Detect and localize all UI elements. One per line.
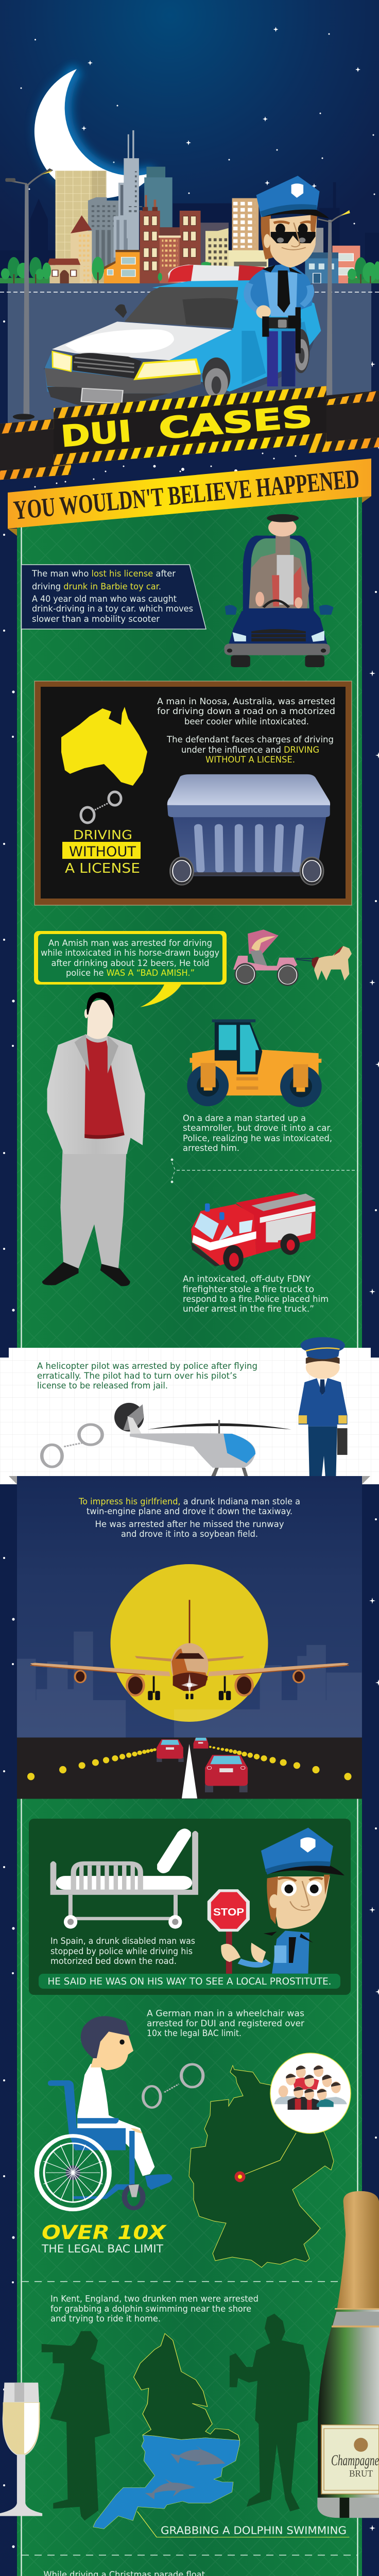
icon: running police officer <box>205 2576 359 2577</box>
case: Kent dolphin text: and trying to ride it home. <box>50 2314 161 2324</box>
icon: champagne bottle <box>317 2191 379 2518</box>
OVER 10X legal BAC limit callout: THE LEGAL BAC LIMIT <box>41 2243 163 2255</box>
dashed separator <box>22 2554 357 2555</box>
case: Amish man speech bubble <box>34 931 227 1007</box>
yellow subtitle banner <box>8 459 371 536</box>
case: fire truck: respond to a fire.Police placed him <box>183 1294 329 1304</box>
map of England with dolphins <box>93 2333 349 2537</box>
icon: hospital bed <box>50 1828 198 1929</box>
map pin <box>235 2171 245 2182</box>
text block: beer cooler while intoxicated. <box>184 717 309 726</box>
case: Kent dolphin text <box>50 2294 259 2324</box>
case: fire truck: firefighter stole a fire truck to <box>183 1284 314 1294</box>
map of Germany with pin and circle <box>189 2053 351 2267</box>
panel: helicopter pilot: A helicopter pilot was arrested by police after flying <box>37 1361 257 1371</box>
case: German man in wheelchair text <box>147 2008 304 2038</box>
case: toy car text box: The man who lost his license after <box>31 569 176 579</box>
green panel background <box>17 494 362 2576</box>
icon: handcuffs <box>81 792 121 823</box>
quote banner: HE SAID HE WAS ON HIS WAY TO SEE A LOCAL PROSTITUTE. <box>47 1976 332 1987</box>
panel: chalkboard beer cooler story <box>35 681 352 905</box>
case: toy car text box: slower than a mobility scooter <box>32 614 160 624</box>
icon: airplane front view <box>30 1600 349 1700</box>
stop sign label: STOP <box>213 1907 244 1918</box>
case: Kent dolphin text: In Kent, England, two drunken men were arrested <box>50 2294 259 2304</box>
night sky stars <box>21 27 375 487</box>
panel: helicopter pilot: license to be released from jail. <box>37 1381 168 1391</box>
panel: stolen plane at night: He was arrested after he missed the runway <box>95 1519 284 1529</box>
icon: dolphin upper <box>170 2445 225 2465</box>
city skyline <box>0 130 379 283</box>
icon: man in grey suit <box>42 992 145 1286</box>
dashed separator <box>22 2281 344 2282</box>
case: steamroller: On a dare a man started up a <box>183 1113 306 1123</box>
case: German man in wheelchair text: A German man in a wheelchair was <box>147 2008 304 2019</box>
case: steamroller: arrested him. <box>183 1143 239 1153</box>
case: Amish man speech bubble: while intoxicated in his horse-drawn buggy <box>41 948 219 958</box>
police car <box>43 265 321 406</box>
icon: map of Australia <box>61 707 147 786</box>
highway with yellow road lights and red cars <box>17 1737 362 1799</box>
panel: stolen plane at night: and drove it into a soybean field. <box>121 1529 258 1539</box>
label: driving without a license: WITHOUT <box>69 844 136 860</box>
circle: group of people <box>270 2053 351 2133</box>
icon: officer with stop sign <box>208 1827 344 1974</box>
icon: dolphin lower <box>145 2479 195 2499</box>
icon: medium red car <box>157 1739 184 1762</box>
case: Amish man speech bubble: An Amish man was arrested for driving <box>48 938 212 948</box>
icon: man in wheelchair <box>37 2016 172 2210</box>
case: motorized bed panel <box>29 1819 351 1995</box>
case: motorized bed panel: motorized bed down the road. <box>50 1956 177 1966</box>
caution tape ribbon with title <box>0 386 379 480</box>
case: toy car text box <box>22 565 206 629</box>
case: fire truck: under arrest in the fire truck.” <box>183 1304 314 1314</box>
icon: horse and buggy <box>233 929 352 986</box>
case: Amish man speech bubble: police he WAS A “BAD AMISH.” <box>66 968 195 978</box>
title: DUI Cases: DUI <box>60 414 133 454</box>
text block: for driving down a road on a motorized <box>157 706 335 716</box>
icon: helicopter <box>114 1403 291 1486</box>
case: German man in wheelchair text: arrested for DUI and registered over <box>147 2019 304 2028</box>
background skyline <box>17 1632 362 1737</box>
case: Amish man speech bubble: after drinking about 12 beers, He told <box>51 958 209 968</box>
label: grabbing a dolphin swimming: GRABBING A DOLPHIN SWIMMING <box>161 2524 347 2537</box>
label: driving without a license: DRIVING <box>73 827 132 842</box>
text block: The defendant faces charges of driving <box>166 735 334 744</box>
text block: WITHOUT A LICENSE. <box>205 755 295 765</box>
silhouette: man drinking left <box>42 2331 110 2520</box>
title: DUI Cases: CASES <box>158 400 314 446</box>
case: fire truck <box>183 1192 329 1314</box>
case: steamroller: steamroller, but drove it into a car. <box>183 1123 332 1133</box>
dashed separator with pin <box>171 1159 357 1183</box>
icon: small red car <box>194 1738 209 1749</box>
text block: A man in Noosa, Australia, was arrested <box>157 697 335 706</box>
title: DUI Cases <box>60 400 314 454</box>
panel: helicopter pilot <box>0 1337 379 1526</box>
silhouette: man drinking right <box>230 2314 310 2512</box>
street lamps <box>5 168 350 420</box>
case: steamroller: Police, realizing he was intoxicated, <box>183 1133 332 1143</box>
panel: helicopter pilot: erratically. The pilot had to turn over his pilot’s <box>37 1371 237 1381</box>
icon: handcuffs <box>143 2064 203 2108</box>
label: driving without a license <box>62 827 141 876</box>
panel: stolen plane at night <box>17 1476 362 1738</box>
icon: large red car <box>205 1755 248 1792</box>
case: motorized bed panel: In Spain, a drunk disabled man was <box>50 1936 195 1946</box>
crescent moon <box>35 69 154 199</box>
police officer with sunglasses <box>245 176 329 386</box>
case: toy car text box: drink-driving in a toy car. which moves <box>32 604 193 614</box>
case: Kent dolphin text: for grabbing a dolphin swimming near the shore <box>50 2304 251 2314</box>
OVER 10X legal BAC limit callout: OVER 10X <box>42 2222 167 2244</box>
panel: stolen plane at night: twin-engine plane and drove it down the taxiway. <box>87 1506 292 1516</box>
case: motorized bed panel: stopped by police while driving his <box>50 1946 193 1956</box>
text block: under the influence and DRIVING <box>181 745 319 755</box>
icon: old man in toy car <box>225 514 334 667</box>
label: driving without a license: A LICENSE <box>65 861 140 876</box>
case: toy car text box: A 40 year old man who was caught <box>32 594 177 604</box>
bottle label: Champagne Brut <box>331 2452 379 2479</box>
case: German man in wheelchair text: 10x the legal BAC limit. <box>147 2028 242 2038</box>
case: toy car text box: driving drunk in Barbie toy car. <box>32 582 161 591</box>
icon: pilot <box>299 1337 348 1526</box>
case: fire truck: An intoxicated, off-duty FDNY <box>183 1274 311 1284</box>
case: steamroller <box>183 1020 332 1153</box>
OVER 10X legal BAC limit callout <box>41 2222 167 2255</box>
bottle label: Champagne Brut: BRUT <box>349 2468 373 2479</box>
text block <box>157 697 335 765</box>
icon: motorized beer cooler <box>167 774 330 885</box>
road surface <box>0 283 379 464</box>
icon: champagne glass <box>0 2383 42 2516</box>
panel: stolen plane at night: To impress his girlfriend, a drunk Indiana man stole a <box>78 1497 300 1506</box>
icon: handcuffs <box>42 1425 102 1467</box>
icon: full moon <box>110 1564 268 1722</box>
